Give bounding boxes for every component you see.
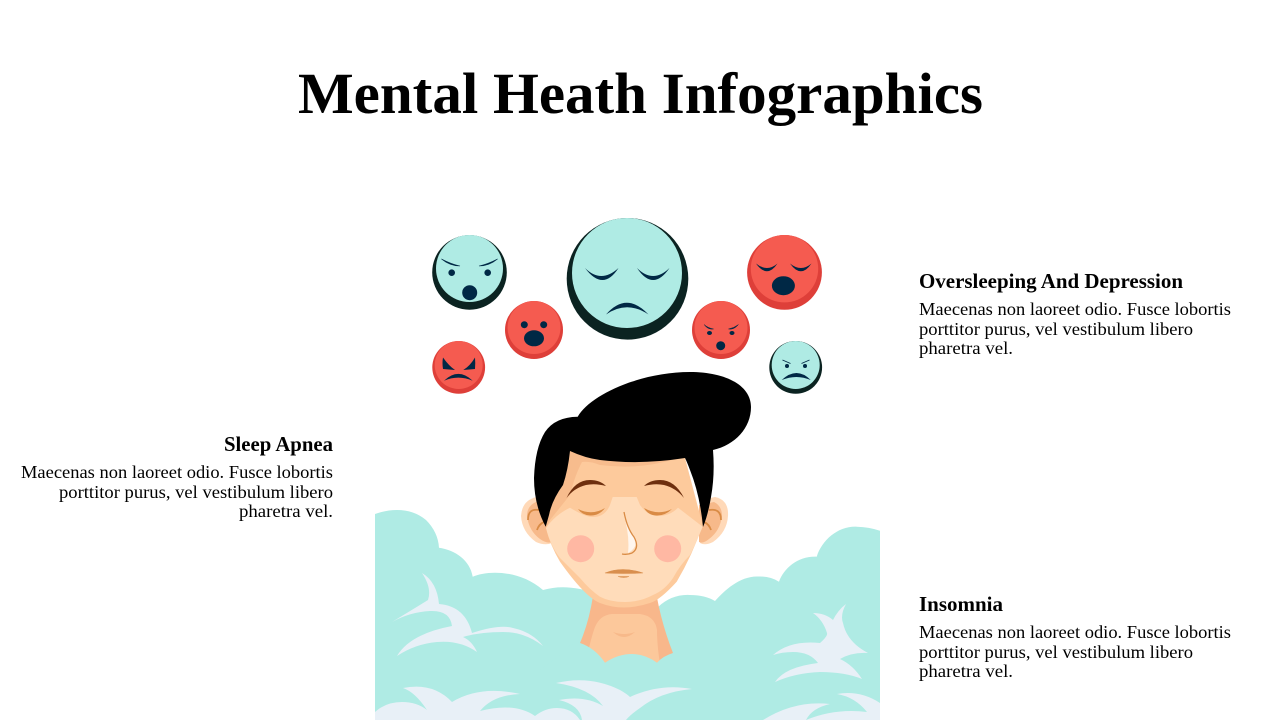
ears [521, 497, 728, 544]
heading: Oversleeping And Depression: Oversleeping And Depression [919, 269, 1183, 293]
back cloud [375, 510, 880, 720]
body: Oversleeping And Depression [919, 299, 1231, 358]
body: Oversleeping And Depression: porttitor purus, vel vestibulum libero [919, 319, 1193, 339]
text block: Sleep Apnea [21, 432, 333, 521]
heading: Sleep Apnea: Sleep Apnea [224, 432, 333, 456]
mouth [605, 570, 643, 578]
illustration: person resting in clouds [375, 372, 880, 720]
icon: small teal frowning emoji [769, 341, 822, 394]
nose highlight [623, 512, 636, 553]
neck [580, 596, 673, 670]
body: Sleep Apnea [21, 462, 333, 521]
nose outline [622, 512, 637, 554]
body: Sleep Apnea: porttitor purus, vel vestibulum libero [59, 482, 333, 502]
icon: teal angry-surprised emoji [432, 235, 507, 310]
heading: Insomnia: Insomnia [919, 592, 1003, 616]
face [546, 451, 703, 608]
cloud swirls [375, 573, 880, 720]
icon: large teal sad emoji [567, 218, 688, 340]
icon: red furious emoji [432, 341, 485, 394]
body: Sleep Apnea: Maecenas non laoreet odio. Fusce lobortis [21, 462, 333, 482]
body: Insomnia: porttitor purus, vel vestibulum libero [919, 642, 1193, 662]
cheeks [567, 535, 594, 562]
icon: large red sad emoji [747, 235, 822, 310]
text block: Insomnia [919, 592, 1231, 681]
body: Sleep Apnea: pharetra vel. [239, 501, 333, 521]
hair [534, 372, 751, 527]
eyebrows [566, 480, 606, 498]
icon: red surprised emoji [505, 301, 563, 359]
text block: Oversleeping And Depression [919, 269, 1231, 358]
body: Oversleeping And Depression: Maecenas non laoreet odio. Fusce lobortis [919, 299, 1231, 319]
closed eyes [578, 508, 605, 516]
body: Oversleeping And Depression: pharetra vel. [919, 338, 1013, 358]
front cloud [540, 643, 720, 720]
body: Insomnia: Maecenas non laoreet odio. Fusce lobortis [919, 622, 1231, 642]
title: Mental Heath Infographics [298, 61, 983, 126]
icon: red angry-surprised emoji [692, 301, 750, 359]
body: Insomnia [919, 622, 1231, 681]
body: Insomnia: pharetra vel. [919, 661, 1013, 681]
